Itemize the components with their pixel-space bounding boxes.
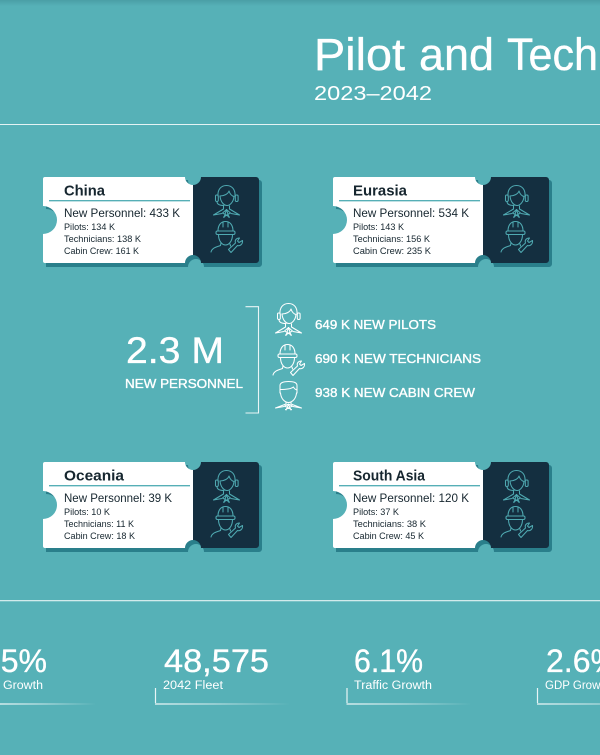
stat: fleet growth xyxy=(0,643,96,705)
stat: traffic growth: 6.1% xyxy=(354,643,423,679)
stat: traffic growth: Traffic Growth xyxy=(354,680,432,692)
panel: Eurasia: New Personnel: 534 K xyxy=(353,208,469,220)
title: Tech xyxy=(507,29,598,80)
panel: Eurasia: Technicians: 156 K xyxy=(353,234,430,244)
panel: South Asia xyxy=(333,462,552,552)
panel: China: China xyxy=(64,182,106,200)
title xyxy=(314,29,598,80)
stat: 2042 fleet: 48,575 xyxy=(164,643,269,679)
panel: Oceania: New Personnel: 39 K xyxy=(64,493,172,505)
panel: China xyxy=(43,177,262,267)
panel: China: Technicians: 138 K xyxy=(64,234,141,244)
panel: Eurasia: Pilots: 143 K xyxy=(353,222,404,232)
panel: Oceania: Technicians: 11 K xyxy=(64,519,134,529)
panel: Oceania: Pilots: 10 K xyxy=(64,507,110,517)
new technicians: 690 K NEW TECHNICIANS xyxy=(315,352,481,366)
panel: South Asia: South Asia xyxy=(353,468,426,484)
panel: Oceania xyxy=(43,462,262,552)
panel: South Asia: Cabin Crew: 45 K xyxy=(353,531,424,541)
bracket xyxy=(246,307,258,413)
panel: Oceania: Cabin Crew: 18 K xyxy=(64,531,135,541)
icon: pilot xyxy=(276,304,302,336)
total new personnel: 2.3 M xyxy=(126,330,224,371)
panel: South Asia: Pilots: 37 K xyxy=(353,507,399,517)
stat: 2042 fleet: 2042 Fleet xyxy=(163,680,224,692)
title: and xyxy=(419,29,494,80)
total new personnel: NEW PERSONNEL xyxy=(125,377,243,391)
panel: China: New Personnel: 433 K xyxy=(64,208,180,220)
panel: Eurasia: Eurasia xyxy=(353,182,408,200)
stat: 2042 fleet xyxy=(155,643,290,705)
stat: traffic growth xyxy=(346,643,472,705)
new cabin crew: 938 K NEW CABIN CREW xyxy=(315,386,475,400)
panel: South Asia: New Personnel: 120 K xyxy=(353,493,469,505)
stat: GDP growth xyxy=(537,643,600,705)
total new personnel xyxy=(125,330,243,391)
icon: technician xyxy=(273,344,305,376)
title: Pilot xyxy=(314,29,406,80)
panel: China: Pilots: 134 K xyxy=(64,222,115,232)
panel: South Asia: Technicians: 38 K xyxy=(353,519,426,529)
panel: Eurasia: Cabin Crew: 235 K xyxy=(353,246,431,256)
subtitle: years: 2023–2042 xyxy=(314,83,432,105)
panel: Oceania: Oceania xyxy=(64,468,125,484)
panel: Eurasia xyxy=(333,177,552,267)
icon: cabin crew xyxy=(276,382,302,410)
stat: fleet growth: Growth xyxy=(3,680,43,692)
new pilots: 649 K NEW PILOTS xyxy=(315,318,436,332)
panel: China: Cabin Crew: 161 K xyxy=(64,246,139,256)
